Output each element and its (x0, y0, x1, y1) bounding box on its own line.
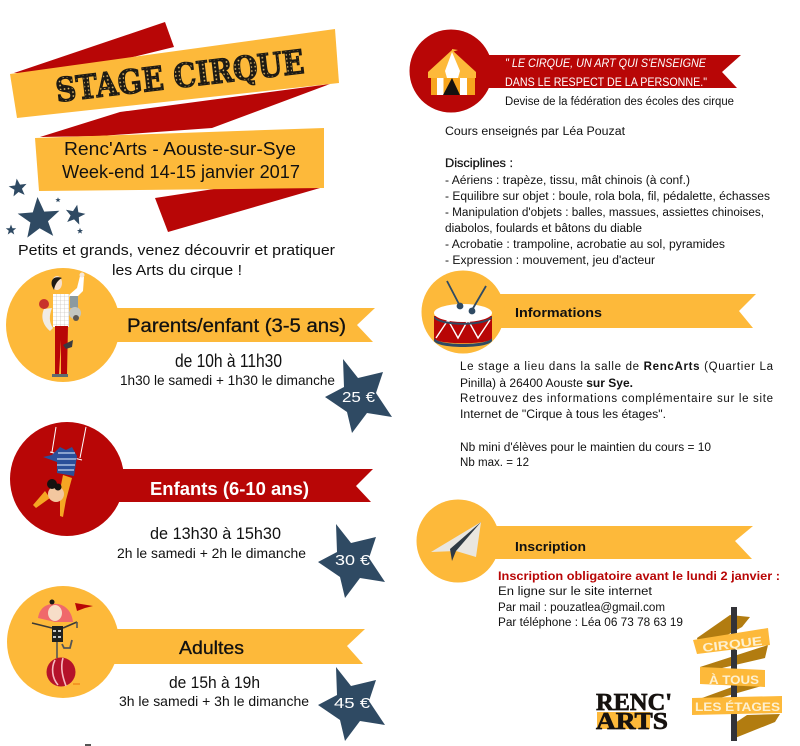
text block: disciplines: - Equilibre sur objet : boule, rola bola, fil, pédalette, échasses (445, 191, 770, 203)
price star: 30 € (335, 552, 371, 569)
circle (422, 270, 504, 354)
heading: Enfants (6-10 ans) (150, 479, 309, 499)
text block: informations: Internet de "Cirque à tous les étages". (460, 409, 666, 421)
schedule: 1h30 le samedi + 1h30 le dimanche (120, 372, 335, 388)
intro text: Petits et grands, venez découvrir et pratiquer (18, 242, 335, 259)
circle (416, 500, 500, 582)
text block: informations: Nb mini d'élèves pour le maintien du cours = 10 (460, 442, 711, 454)
text block: disciplines: diabolos, foulards et bâtons du diable (445, 223, 642, 235)
text block: disciplines: Disciplines : (445, 158, 513, 170)
decorative stars (6, 177, 87, 238)
ribbon (490, 294, 756, 328)
panel: enfants (10, 422, 385, 598)
sign text: À TOUS (709, 672, 759, 687)
ribbon (110, 308, 375, 342)
panel: adultes (7, 586, 385, 741)
ribbon (110, 469, 373, 502)
circle (10, 422, 124, 536)
text block: informations: Nb max. = 12 (460, 457, 529, 469)
schedule (119, 673, 309, 709)
icon: drum (434, 281, 492, 347)
text block: inscription: Par mail : pouzatlea@gmail.com (498, 602, 665, 614)
heading: Inscription (515, 539, 586, 554)
schedule (117, 525, 306, 561)
logo: Renc'Arts: RENC' (596, 690, 672, 716)
quote: DANS LE RESPECT DE LA PERSONNE." (505, 77, 707, 89)
yellow sign boards (692, 628, 782, 715)
sign text: CIRQUE (702, 634, 763, 655)
price star (318, 524, 385, 598)
circle (6, 268, 120, 382)
schedule: de 10h à 11h30 (175, 351, 282, 371)
text block: inscription: Par téléphone : Léa 06 73 78 63 19 (498, 617, 683, 629)
subtitle banner (35, 128, 324, 191)
panel: informations (422, 270, 756, 354)
text block: disciplines: - Acrobatie : trampoline, acrobatie au sol, pyramides (445, 239, 725, 251)
quote (505, 58, 707, 89)
price star: 25 € (342, 389, 376, 406)
icon: trapeze child (33, 427, 86, 517)
heading: Parents/enfant (3-5 ans) (127, 316, 346, 337)
text block: disciplines: Cours enseignés par Léa Pouzat (445, 126, 626, 138)
sign text (695, 634, 780, 714)
panel: parents/enfant (6, 268, 392, 433)
small mark at page bottom (85, 744, 91, 746)
text block: informations: Pinilla) à 26400 Aouste sur Sye. (460, 378, 633, 390)
price star (325, 359, 392, 433)
schedule: de 15h à 19h (169, 673, 260, 692)
signpost (692, 607, 782, 741)
subtitle text: Week-end 14-15 janvier 2017 (62, 162, 300, 182)
logo: Renc'Arts: ARTS (596, 709, 668, 735)
red ribbon below subtitle (155, 185, 320, 232)
icon: equilibrist on ball (32, 600, 93, 686)
text block: inscription (498, 569, 780, 629)
circle (7, 586, 119, 698)
panel: devise (410, 30, 741, 112)
text block: informations: Le stage a lieu dans la salle de RencArts (Quartier La (460, 361, 774, 373)
sign text: LES ÉTAGES (695, 699, 780, 714)
schedule (120, 351, 335, 388)
ribbon (485, 526, 753, 559)
text block: informations (460, 361, 774, 469)
ribbon (105, 629, 365, 664)
red ribbon behind title (14, 22, 174, 75)
ribbon (480, 55, 741, 88)
text block: disciplines: - Aériens : trapèze, tissu, mât chinois (à conf.) (445, 175, 690, 187)
intro text (18, 242, 335, 279)
text block: disciplines: - Expression : mouvement, jeu d'acteur (445, 255, 655, 267)
text block: inscription: En ligne sur le site internet (498, 586, 653, 598)
text block: disciplines (445, 126, 770, 267)
schedule: de 13h30 à 15h30 (150, 525, 281, 543)
text block: inscription: Inscription obligatoire avant le lundi 2 janvier : (498, 569, 780, 583)
circle (410, 30, 492, 112)
text block: informations: Retrouvez des informations complémentaire sur le site (460, 393, 773, 405)
subtitle text: Renc'Arts - Aouste-sur-Sye (64, 139, 296, 159)
title banner (10, 29, 339, 118)
intro text: les Arts du cirque ! (112, 262, 242, 279)
brown ribbons (697, 615, 780, 738)
quote source: Devise de la fédération des écoles des cirque (505, 96, 734, 108)
header banners (10, 22, 339, 232)
schedule: 2h le samedi + 2h le dimanche (117, 545, 306, 561)
red ribbon between title and subtitle (40, 84, 330, 137)
subtitle text (62, 139, 300, 182)
pole (731, 607, 737, 741)
quote: " LE CIRQUE, UN ART QUI S'ENSEIGNE (505, 58, 706, 70)
title: STAGE CIRQUE (53, 42, 306, 110)
icon: juggling parent with children (39, 272, 84, 377)
text block: disciplines: - Manipulation d'objets : balles, massues, assiettes chinoises, (445, 207, 764, 219)
schedule: 3h le samedi + 3h le dimanche (119, 693, 309, 709)
panel: inscription (416, 500, 753, 582)
price star: 45 € (334, 695, 371, 712)
logo: Renc'Arts (596, 690, 672, 735)
heading: Informations (515, 305, 602, 320)
price star (318, 667, 385, 741)
icon: paper plane (431, 522, 481, 561)
heading: Adultes (179, 638, 244, 658)
icon: circus tent (428, 49, 476, 95)
